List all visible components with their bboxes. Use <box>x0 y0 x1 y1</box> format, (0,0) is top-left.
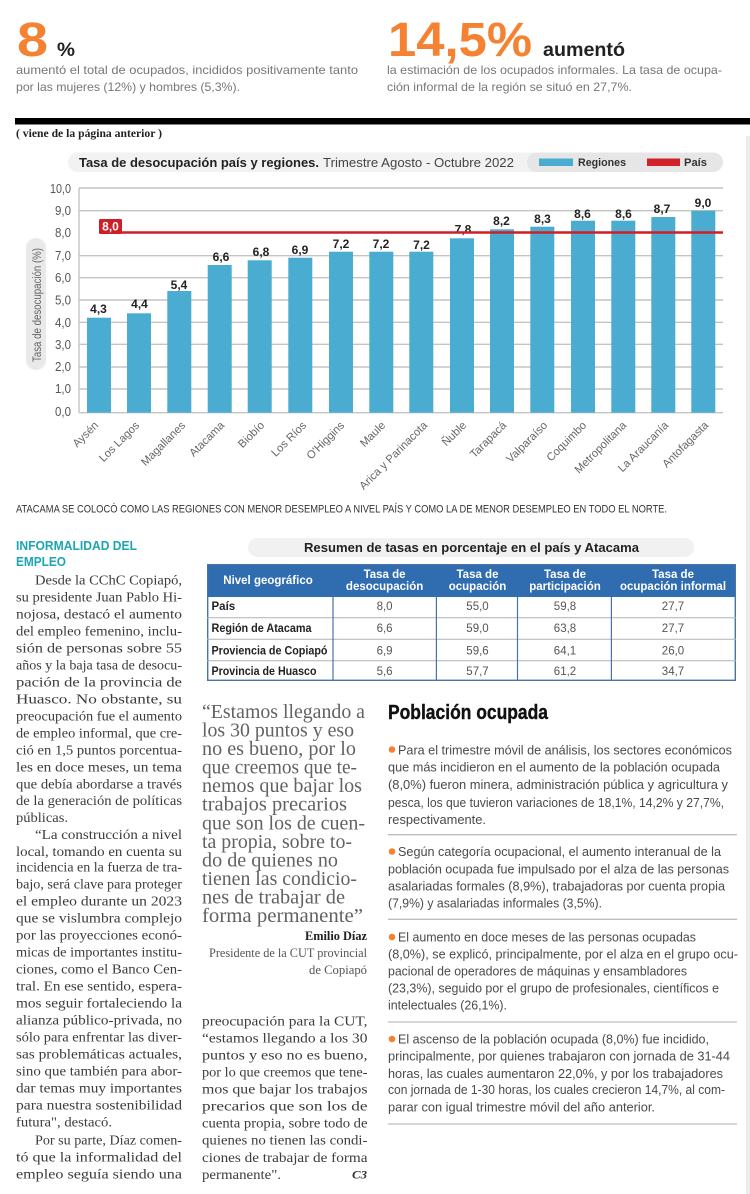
region labels: Tarapacá <box>468 419 510 461</box>
bullet: twelve-month increase: pacional de operadores de máquinas y ensambladores <box>388 964 687 978</box>
stat: 8 %: aumentó el total de ocupados, incididos positivamente tanto <box>16 63 358 77</box>
y axis labels <box>50 182 71 419</box>
stat: 14,5% aumentó: 14,5% <box>388 14 532 67</box>
quote attribution: de Copiapó <box>309 963 367 977</box>
subheading <box>16 539 137 569</box>
region labels: O'Higgins <box>305 419 347 462</box>
pull quote: los 30 puntos y eso <box>202 720 354 742</box>
region labels: Coquimbo <box>545 420 589 464</box>
value labels: 4,3 <box>90 302 107 316</box>
body text: ció en 1,5 puntos porcentua- <box>16 742 182 757</box>
body text: Huasco. No obstante, su <box>16 691 183 706</box>
body text: Por su parte, Díaz comen- <box>35 1132 182 1148</box>
end mark: C3 <box>352 1168 367 1182</box>
bullet: working hours <box>388 1033 730 1115</box>
body text: les en doce meses, un tema <box>16 759 182 774</box>
body text: preocupación fue el aumento <box>16 708 182 723</box>
table rows: País <box>212 601 235 613</box>
table rows: Proviencia de Copiapó <box>212 646 328 658</box>
body text: su presidente Juan Pablo Hi- <box>16 590 182 604</box>
table rows: 5,6 <box>377 666 393 678</box>
body text: para nuestra sostenibilidad <box>16 1098 182 1112</box>
body text: tó que la informalidad del <box>16 1150 182 1164</box>
table header: desocupación <box>346 581 423 593</box>
table rows: 27,7 <box>662 623 684 635</box>
article column 2: puntos y eso no es bueno, <box>202 1048 368 1063</box>
body text: sólo para enfrentar las diver- <box>16 1030 182 1044</box>
bullet: working hours: horas, las cuales aumentaron 22,0%, y por los trabajadores <box>388 1067 723 1081</box>
quote attribution <box>209 928 368 977</box>
subheading: INFORMALIDAD DEL <box>16 539 137 553</box>
pull quote: ta propia, sobre to- <box>202 831 352 853</box>
body text: empleo seguía siendo una <box>16 1166 182 1182</box>
table rows: 63,8 <box>554 623 576 635</box>
chart title bar and legend: Trimestre Agosto - Octubre 2022 <box>323 155 514 170</box>
bullet: occupational category: asalariadas formales (8,9%), trabajadoras por cuenta propia <box>388 879 725 893</box>
pull quote: que son los de cuen- <box>202 812 365 834</box>
body text: alianza público-privada, no <box>16 1012 182 1028</box>
value labels: 7,2 <box>333 237 350 251</box>
article column 2: preocupación para la CUT, <box>202 1014 368 1028</box>
body text: sión de personas sobre 55 <box>16 640 182 655</box>
table heading <box>248 538 694 557</box>
value labels: 7,8 <box>455 222 472 236</box>
pull quote: no es bueno, por lo <box>202 738 356 760</box>
bar chart: unemployment by region <box>26 182 723 492</box>
y axis labels: 3,0 <box>55 338 71 352</box>
y axis labels: 9,0 <box>55 204 71 218</box>
table rows: 59,0 <box>466 623 489 635</box>
pull quote: do de quienes no <box>202 849 338 871</box>
chart title bar and legend: País <box>684 157 707 169</box>
bullet: sectors: respectivamente. <box>388 813 486 827</box>
region labels: Metropolitana <box>573 419 630 476</box>
stat: 14,5% aumentó <box>387 14 722 94</box>
bullet: working hours: con jornada de 1-30 horas, los cuales crecieron 14,7%, al com- <box>388 1083 725 1097</box>
quote attribution: Presidente de la CUT provincial <box>209 946 368 960</box>
table rows: 61,2 <box>554 666 576 678</box>
value labels: 4,4 <box>131 297 148 311</box>
value labels: 8,3 <box>534 212 551 226</box>
bullet: working hours: principalmente, por quienes trabajaron con jornada de 31-44 <box>388 1050 730 1064</box>
article column 2: por lo que creemos que tene- <box>202 1065 368 1080</box>
national rate line: 8,0 <box>102 220 119 234</box>
article column 1 <box>16 539 183 1182</box>
y axis title: Tasa de desocupación (%) <box>32 248 44 362</box>
body text: sas problemáticas actuales, <box>16 1046 182 1062</box>
article column 2: “estamos llegando a los 30 <box>202 1030 368 1046</box>
table rows: 59,6 <box>466 646 489 658</box>
body text: dar temas muy importantes <box>16 1080 182 1096</box>
stat: 8 %: 8 <box>17 14 48 67</box>
quote attribution: Emilio Díaz <box>305 928 367 943</box>
table header: Nivel geográfico <box>223 575 313 587</box>
body text: bajo, será clave para proteger <box>16 876 183 892</box>
y axis labels: 0,0 <box>55 405 71 419</box>
table rows: 6,9 <box>377 646 393 658</box>
bullet: occupational category: Según categoría ocupacional, el aumento interanual de la <box>398 845 721 859</box>
value labels: 8,6 <box>574 207 591 221</box>
bullet: occupational category: población ocupada fue impulsado por el alza de las personas <box>388 862 729 876</box>
pull quote: nemos que bajar los <box>202 775 362 797</box>
stat: 8 % <box>16 14 358 94</box>
pull quote: tienen las condicio- <box>202 868 357 890</box>
region labels: Arica y Parinacota <box>357 419 431 492</box>
region labels: Los Ríos <box>269 419 309 459</box>
table header: participación <box>529 581 601 593</box>
body text: sino que también para abor- <box>16 1064 182 1078</box>
body text: el empleo durante un 2023 <box>16 894 182 908</box>
body text: “La construcción a nivel <box>35 827 182 842</box>
pull quote <box>202 701 368 977</box>
region labels: La Araucanía <box>616 419 672 475</box>
table header: Tasa de <box>544 569 586 581</box>
region labels: Los Lagos <box>97 419 142 465</box>
body text: pación de la provincia de <box>16 674 182 689</box>
pull quote: que creemos que te- <box>202 757 357 779</box>
y axis labels: 6,0 <box>55 271 71 285</box>
table header: Tasa de <box>457 569 498 581</box>
value labels: 6,8 <box>253 245 270 259</box>
bullet: working hours: El ascenso de la población ocupada (8,0%) fue incidido, <box>398 1033 709 1047</box>
body text: nojosa, destacó el aumento <box>16 606 182 622</box>
region labels: Atacama <box>187 419 228 459</box>
body text: de empleo informal, que cre- <box>16 725 182 740</box>
value labels: 6,6 <box>213 250 230 264</box>
chart title bar and legend: Regiones <box>578 157 626 169</box>
body text: de la generación de políticas <box>16 793 182 808</box>
article column 2: mos que bajar los trabajos <box>202 1082 368 1097</box>
body text: años y la baja tasa de desocu- <box>16 657 182 672</box>
chart title bar and legend <box>68 152 723 172</box>
table rows: 34,7 <box>662 666 684 678</box>
table rows: 64,1 <box>554 646 576 658</box>
stat: 14,5% aumentó: la estimación de los ocupados informales. La tasa de ocupa- <box>387 63 722 77</box>
body text: local, tomando en cuenta su <box>16 844 182 859</box>
y axis labels: 5,0 <box>55 294 71 308</box>
y axis labels: 1,0 <box>55 382 71 396</box>
table rows <box>212 601 684 678</box>
table header <box>223 569 726 593</box>
stat: 14,5% aumentó: ción informal de la región se situó en 27,7%. <box>387 80 632 94</box>
article column 2: quienes no tienen las condi- <box>202 1133 368 1148</box>
y axis labels: 2,0 <box>55 360 71 374</box>
continuation note: ( viene de la página anterior ) <box>16 128 162 140</box>
region labels: Valparaíso <box>504 420 550 465</box>
heading: Población ocupada: Población ocupada <box>388 702 549 724</box>
value labels: 7,2 <box>413 238 430 252</box>
region labels: Maule <box>358 420 388 450</box>
stat: 8 %: % <box>57 40 75 61</box>
table rows: 6,6 <box>377 623 393 635</box>
bullet: working hours: parar con igual trimestre móvil del año anterior. <box>388 1101 655 1115</box>
table header: Tasa de <box>364 569 406 581</box>
table rows: 27,7 <box>662 601 684 613</box>
table rows: 8,0 <box>377 601 393 613</box>
value labels: 8,2 <box>493 214 510 228</box>
pull quote: trabajos precarios <box>202 794 347 816</box>
article column 2 <box>202 1014 368 1182</box>
value labels: 8,6 <box>615 207 632 221</box>
table rows: Provincia de Huasco <box>212 666 316 678</box>
table rows: 57,7 <box>466 666 489 678</box>
bullet: twelve-month increase: (8,0%), se explicó, principalmente, por el alza en el grupo ocu- <box>388 948 738 962</box>
article column 2: ciones de trabajar de forma <box>202 1150 368 1165</box>
chart title bar and legend: Tasa de desocupación país y regiones. <box>79 155 319 170</box>
bullet: sectors: pesca, los que tuvieron variaciones de 18,1%, 14,2% y 27,7%, <box>388 796 724 810</box>
table header: ocupación <box>449 581 506 593</box>
pull quote: forma permanente” <box>202 905 363 927</box>
bars <box>87 211 715 413</box>
region labels: Biobío <box>236 420 267 451</box>
value labels: 9,0 <box>695 196 712 210</box>
value labels: 7,2 <box>373 237 390 251</box>
y axis labels: 4,0 <box>55 316 71 330</box>
region labels: Ñuble <box>439 419 469 449</box>
table rows: Región de Atacama <box>212 623 312 635</box>
bullet: sectors: (8,0%) fueron minera, administración pública y agricultura y <box>388 778 729 792</box>
body text: ciones, como el Banco Cen- <box>16 962 182 976</box>
bullet: sectors: que más incidieron en el aumento de la población ocupada <box>388 761 720 775</box>
pull quote: nes de trabajar de <box>202 886 345 908</box>
pull quote: “Estamos llegando a <box>202 701 365 723</box>
stat: 14,5% aumentó: aumentó <box>543 39 625 61</box>
y axis labels: 8,0 <box>55 226 71 240</box>
bullet: twelve-month increase: (23,3%), seguido por el grupo de profesionales, científicos e <box>388 982 719 996</box>
table header: Tasa de <box>652 569 694 581</box>
y axis labels: 7,0 <box>55 249 71 263</box>
table header: ocupación informal <box>620 581 726 593</box>
table heading: Resumen de tasas en porcentaje en el país y Atacama <box>304 540 640 555</box>
subheading: EMPLEO <box>16 555 66 569</box>
body text: que se vislumbra complejo <box>16 910 182 926</box>
table rows: 59,8 <box>554 601 576 613</box>
value labels: 6,9 <box>292 243 309 257</box>
body text: incidencia en la fuerza de tra- <box>16 860 182 874</box>
bullet: twelve-month increase: intelectuales (26,1%). <box>388 998 507 1012</box>
body text: del empleo femenino, inclu- <box>16 623 182 638</box>
body text: mos seguir fortaleciendo la <box>16 996 182 1010</box>
body text: públicas. <box>16 810 68 825</box>
body text: micas de importantes institu- <box>16 944 182 960</box>
y axis title <box>26 238 46 370</box>
article column 2: cuenta propia, sobre todo de <box>202 1116 368 1131</box>
body text: Desde la CChC Copiapó, <box>35 572 182 588</box>
value labels <box>90 196 712 316</box>
bullet: sectors <box>388 743 732 827</box>
body text: por las proyecciones econó- <box>16 928 182 942</box>
table: rates summary <box>207 564 736 680</box>
body text: que debía abordarse a través <box>16 776 182 791</box>
value labels: 5,4 <box>171 278 188 292</box>
bullet: occupational category <box>388 845 729 911</box>
value labels: 8,7 <box>654 202 671 216</box>
table rows: 26,0 <box>662 646 684 658</box>
bullet: sectors: Para el trimestre móvil de análisis, los sectores económicos <box>398 743 732 757</box>
black section rule <box>15 118 750 124</box>
bullet: twelve-month increase: El aumento en doce meses de las personas ocupadas <box>398 931 696 945</box>
region labels: Antofagasta <box>660 419 712 470</box>
body text <box>16 572 183 1182</box>
stat: 8 %: por las mujeres (12%) y hombres (5,3%). <box>16 80 240 94</box>
region labels <box>71 419 712 492</box>
region labels: Magallanes <box>139 419 188 469</box>
national rate line <box>99 219 723 234</box>
table rows: 55,0 <box>466 601 489 613</box>
body text: tral. En ese sentido, espera- <box>16 978 182 994</box>
bullet: twelve-month increase <box>388 931 738 1012</box>
y axis labels: 10,0 <box>50 182 71 196</box>
bullet: occupational category: (7,9%) y asalariadas informales (3,5%). <box>388 897 602 911</box>
article column 2: permanente". <box>202 1167 281 1182</box>
article column 2: precarios que son los de <box>202 1099 368 1114</box>
region labels: Aysén <box>71 420 101 450</box>
body text: futura", destacó. <box>16 1114 112 1130</box>
